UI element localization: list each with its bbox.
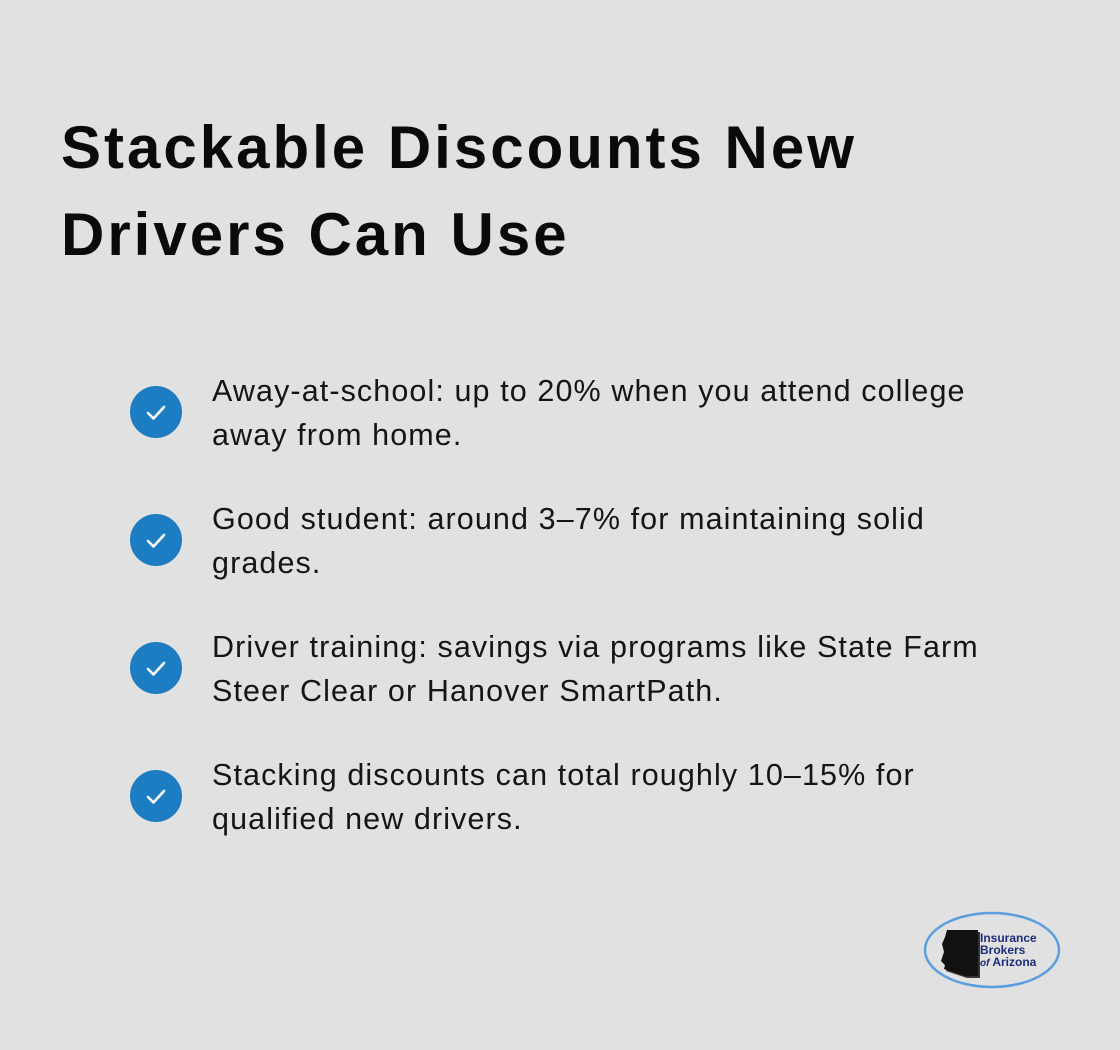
logo — [924, 912, 1060, 988]
text 2 — [212, 502, 925, 580]
icon: check — [130, 386, 182, 438]
text 2: grades. — [212, 546, 321, 580]
text 4 — [212, 758, 915, 836]
text 3: Steer Clear or Hanover SmartPath. — [212, 674, 723, 708]
logo: Insurance — [980, 931, 1037, 945]
text 2: Good student: around 3–7% for maintaining solid — [212, 502, 925, 536]
item 2 — [130, 502, 925, 580]
text 4: Stacking discounts can total roughly 10–15% for — [212, 758, 915, 792]
icon: check — [130, 514, 182, 566]
text 4: qualified new drivers. — [212, 802, 523, 836]
title — [61, 114, 857, 268]
item 4 — [130, 758, 915, 836]
text 3 — [212, 630, 979, 708]
text 1: Away-at-school: up to 20% when you attend college — [212, 374, 966, 408]
icon: check — [130, 770, 182, 822]
text 1 — [212, 374, 966, 452]
logo: of Arizona — [980, 955, 1037, 969]
item 3 — [130, 630, 979, 708]
icon: check — [130, 642, 182, 694]
item 1 — [130, 374, 966, 452]
title: Drivers Can Use — [61, 201, 570, 268]
logo: Brokers — [980, 943, 1026, 957]
text 3: Driver training: savings via programs like State Farm — [212, 630, 979, 664]
title: Stackable Discounts New — [61, 114, 857, 181]
text 1: away from home. — [212, 418, 462, 452]
